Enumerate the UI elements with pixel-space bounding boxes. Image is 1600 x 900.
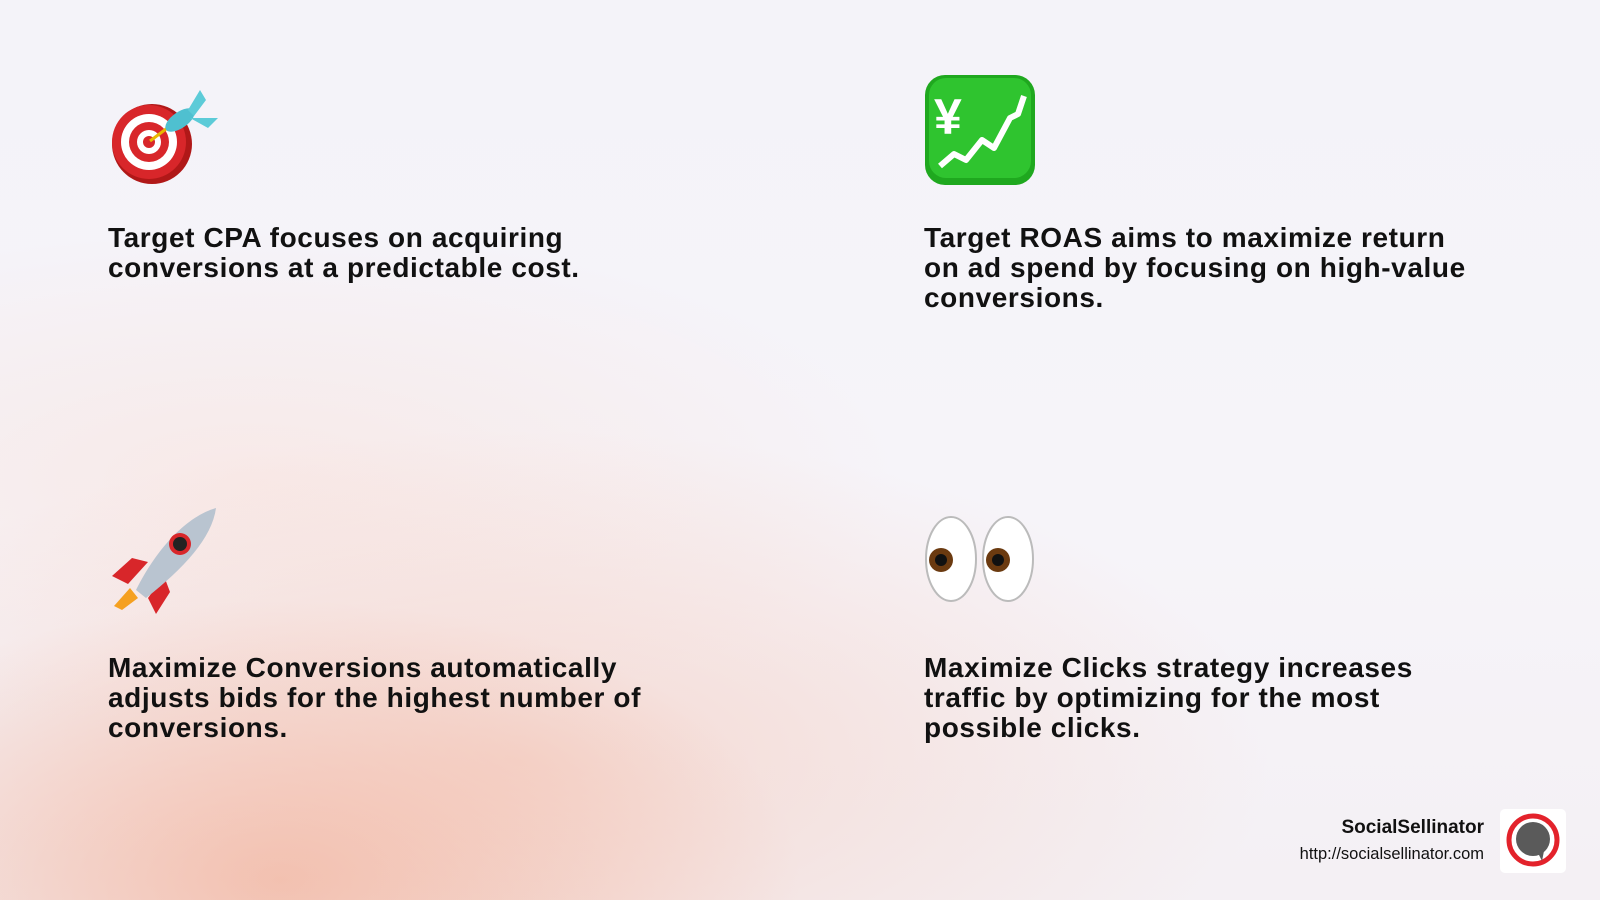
icon: eyes [925,516,1034,602]
text: maximize conversions: adjusts bids for the highest number of [108,682,641,713]
text: target CPA: conversions at a predictable cost. [108,252,580,283]
text: maximize conversions: Maximize Conversions automatically [108,652,617,683]
text: maximize clicks: Maximize Clicks strategy increases [924,652,1413,683]
text: target CPA: Target CPA focuses on acquiring [108,222,563,253]
text: target ROAS: conversions. [924,282,1104,313]
icon: rocket [112,508,216,614]
brand url: http://socialsellinator.com [1300,845,1484,863]
text: maximize conversions [108,652,641,743]
brand name: SocialSellinator [1341,817,1484,838]
text: maximize conversions: conversions. [108,712,288,743]
logo [1500,809,1566,873]
text: target ROAS [924,222,1466,313]
text: maximize clicks: possible clicks. [924,712,1141,743]
text: maximize clicks [924,652,1413,743]
text: target ROAS: on ad spend by focusing on high-value [924,252,1466,283]
text: target CPA [108,222,580,283]
icon: yen chart: ¥ [934,89,962,145]
icon: target with dart [112,90,218,184]
text: maximize clicks: traffic by optimizing for the most [924,682,1380,713]
icon: yen chart [925,75,1035,185]
text: target ROAS: Target ROAS aims to maximize return [924,222,1446,253]
